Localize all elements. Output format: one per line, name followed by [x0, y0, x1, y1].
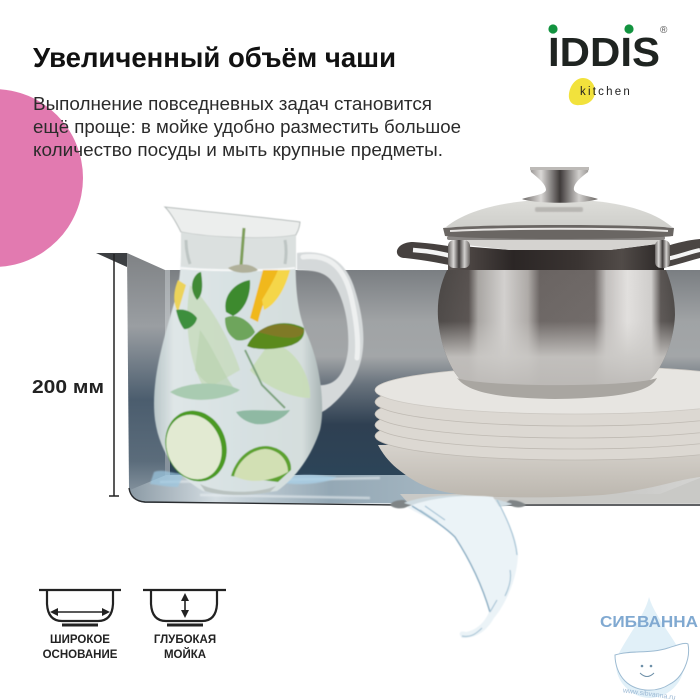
dark band: [448, 243, 665, 270]
sink left wall: [127, 253, 165, 498]
dimension line: 200 mm: [32, 254, 119, 496]
label: wide base: ОСНОВАНИЕ: [43, 649, 118, 661]
water jug: [154, 207, 363, 495]
dimension line: 200 mm: 200 мм: [32, 376, 104, 397]
falling water: [407, 496, 518, 638]
pot left handle: [397, 242, 472, 268]
logo: IDDIS kitchen: [548, 24, 668, 105]
logo: IDDIS kitchen: kitchen: [580, 86, 631, 98]
pot lugs: [448, 240, 470, 268]
description text: ещё проще: в мойке удобно разместить большое: [33, 117, 461, 137]
rim: [447, 236, 665, 240]
plates edges: [375, 412, 700, 460]
lime slices: [155, 402, 237, 490]
label: deep sink: [154, 634, 216, 661]
water line: [180, 268, 295, 270]
icon: deep sink: [143, 590, 226, 625]
mint stem: [241, 228, 244, 266]
jug base: [200, 484, 276, 495]
label: wide base: [43, 634, 118, 661]
sink back wall: [165, 270, 700, 476]
drain ring: [390, 500, 526, 508]
label: deep sink: МОЙКА: [164, 648, 206, 661]
jug neck: [181, 232, 296, 269]
description text: Выполнение повседневных задач становится: [33, 94, 432, 114]
lid knob: [522, 167, 598, 203]
jug handle: [297, 252, 363, 412]
lemon slices: [250, 270, 280, 322]
water stream: [390, 495, 526, 638]
title: Увеличенный объём чаши: [33, 42, 396, 73]
sink illustration: [96, 253, 700, 505]
sink floor: [130, 475, 700, 504]
stack of plates: [375, 366, 700, 505]
bottom bowl: [378, 440, 700, 497]
jug top: [165, 207, 300, 238]
top plate: [375, 366, 700, 414]
icon: wide base sink: [39, 590, 121, 625]
pink circle: [0, 89, 83, 267]
pot body: [438, 270, 675, 398]
large pale leaves: [187, 285, 240, 390]
description text: количество посуды и мыть крупные предметы.: [33, 140, 443, 160]
logo: IDDIS kitchen: IDDIS: [548, 29, 660, 75]
lower pale leaves: [170, 384, 240, 400]
watermark: Sibvanna: [600, 597, 698, 700]
logo: IDDIS kitchen: ®: [660, 25, 668, 36]
pot base: [457, 378, 657, 399]
jug body: [154, 207, 322, 493]
glass lid: [446, 199, 672, 227]
pot right handle: [657, 239, 700, 269]
description text: [33, 94, 461, 160]
label: wide base: ШИРОКОЕ: [50, 634, 110, 646]
plate foot: [400, 478, 700, 505]
watermark: Sibvanna: СИБВАННА: [600, 614, 698, 631]
cooking pot: [397, 167, 700, 399]
label: deep sink: ГЛУБОКАЯ: [154, 634, 216, 646]
leaves: [192, 272, 202, 300]
dark lime: [247, 323, 304, 349]
